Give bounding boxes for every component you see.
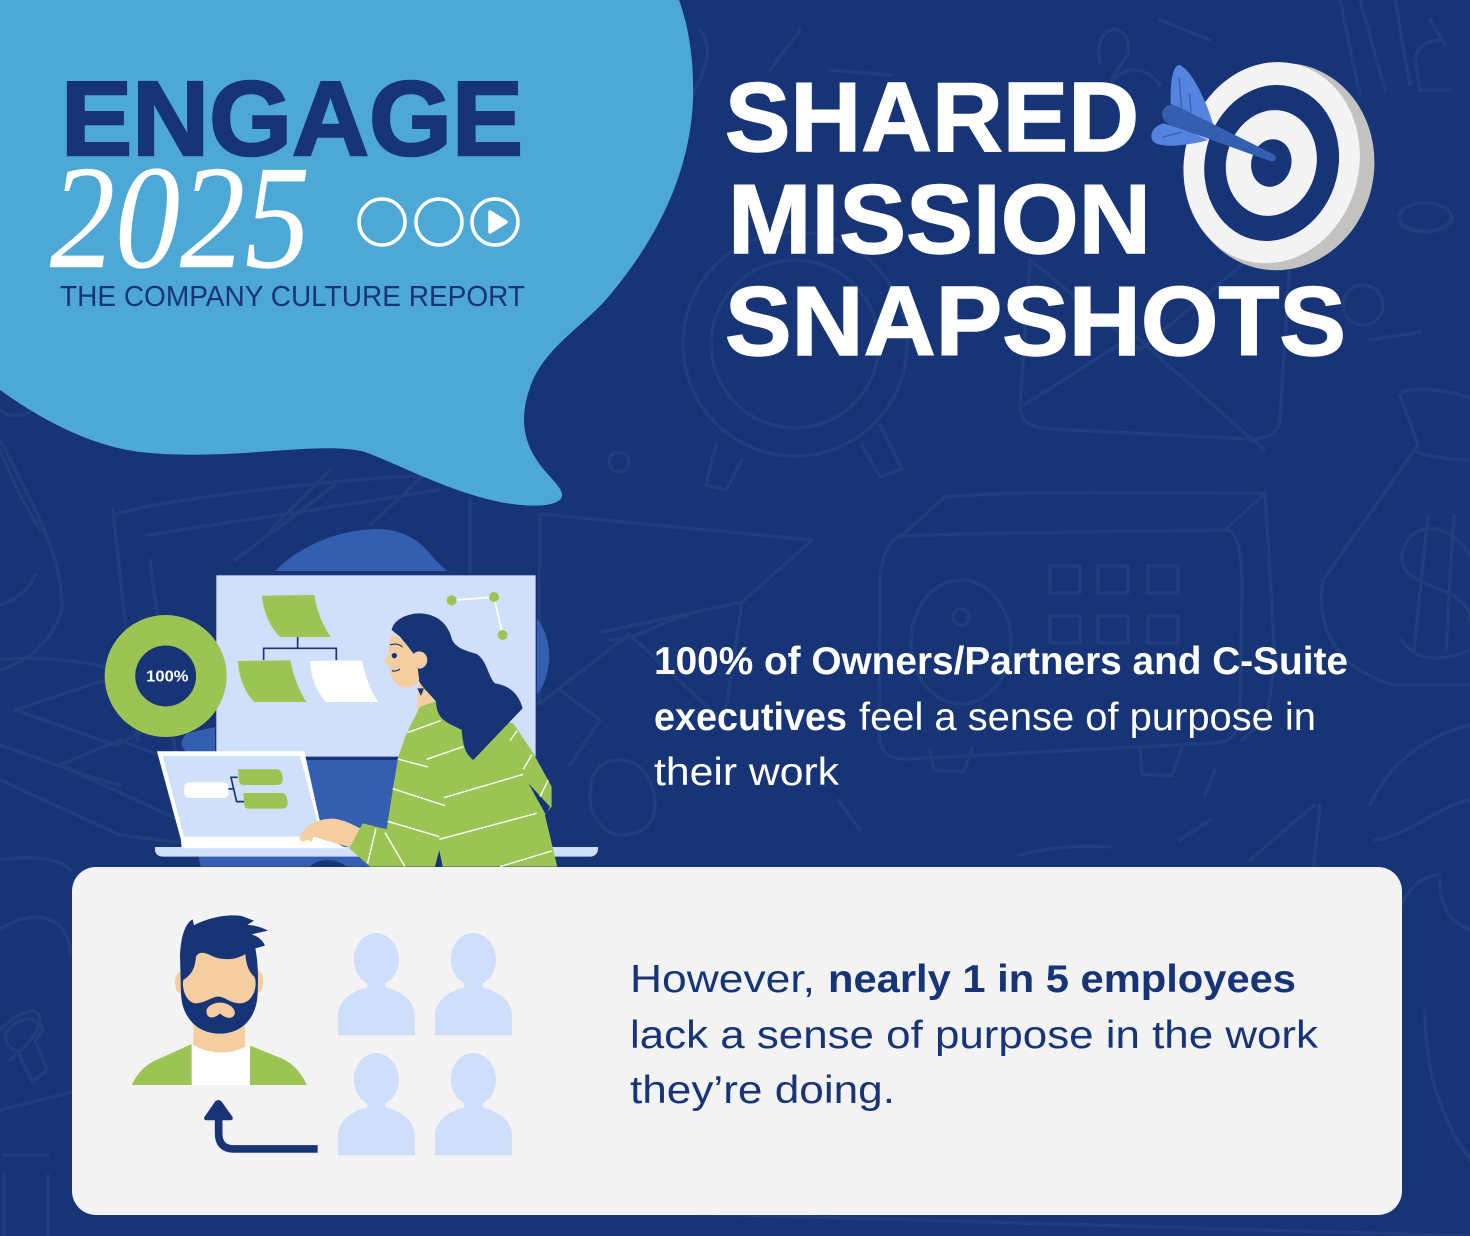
laptop: [155, 751, 598, 857]
statement: leadership purpose: their work: [654, 751, 840, 794]
statement: employees lacking purpose: lack a sense of purpose in the work: [630, 1014, 1319, 1057]
statement: leadership purpose: executives: [654, 696, 847, 739]
main title: SNAPSHOTS: [725, 266, 1346, 376]
2025 script year: 2025: [50, 136, 310, 300]
statement: employees lacking purpose: they’re doing.: [630, 1069, 895, 1112]
main title: SHARED: [725, 62, 1139, 172]
statement: leadership purpose: [654, 640, 1348, 794]
statement: leadership purpose: 100% of Owners/Partners and C-Suite: [654, 640, 1348, 683]
report subtitle: THE COMPANY CULTURE REPORT: [60, 281, 525, 313]
ENGAGE wordmark: ENGAGE: [61, 60, 523, 178]
main title: [725, 62, 1346, 376]
statement: employees lacking purpose: nearly 1 in 5 employees: [828, 958, 1296, 1001]
speech bubble header: [0, 0, 693, 506]
icon: bearded man: [132, 915, 307, 1085]
illustration: woman at board and laptop: [120, 529, 598, 867]
statement: leadership purpose: feel a sense of purpose in: [859, 696, 1316, 739]
statement: employees lacking purpose: However,: [630, 958, 815, 1001]
arrow: from employees to man: [204, 1100, 318, 1149]
icon: target with dart: [1151, 43, 1394, 288]
woman figure: [299, 613, 557, 867]
statement: employees lacking purpose: [630, 958, 1319, 1112]
donut chart 100%: [120, 630, 211, 722]
panel: employee statistic: [72, 867, 1402, 1215]
monitor board: [215, 573, 537, 760]
donut chart 100%: 100%: [146, 669, 189, 686]
main title: MISSION: [728, 164, 1151, 274]
icon: three circles with play button: [359, 199, 518, 245]
icon: group of four employees: [338, 933, 512, 1155]
